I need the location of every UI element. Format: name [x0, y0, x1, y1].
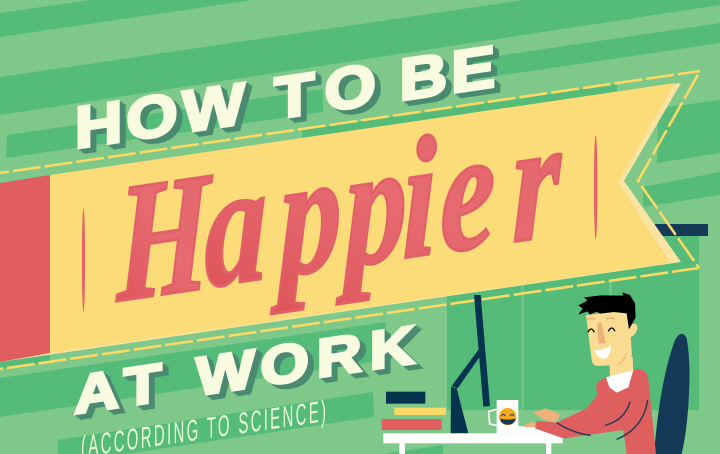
sweater	[535, 369, 656, 454]
eyebrows	[587, 318, 615, 319]
hair	[578, 292, 636, 329]
man's neck and head	[578, 292, 637, 378]
right spindle accent	[594, 135, 598, 239]
heading: how to be: HOWTOBE	[75, 34, 495, 161]
sleeve fold lines	[557, 400, 648, 439]
ribbon red end	[0, 175, 50, 362]
heading: at work: ATWORK	[74, 315, 415, 426]
stitched dashes	[0, 71, 700, 369]
typing hand	[525, 408, 560, 427]
collar	[606, 370, 633, 393]
nose	[597, 323, 606, 343]
left spindle accent	[82, 208, 85, 312]
desk	[383, 433, 563, 454]
heading: how to be: HOWTOBE	[79, 37, 499, 164]
keyboard	[517, 426, 553, 433]
heading: how to be: HOWTOBE	[77, 35, 497, 163]
smile	[594, 345, 611, 359]
heading: at work: ATWORK	[76, 316, 417, 427]
eyes	[588, 328, 615, 332]
book stack	[382, 392, 446, 430]
mug with emoji	[489, 400, 518, 433]
heading: how to be: HOWTOBE	[81, 38, 501, 166]
heading: happier: appier	[205, 81, 562, 325]
heading: at work: ATWORK	[80, 319, 421, 430]
ribbon banner	[0, 83, 681, 362]
cheek line	[617, 351, 627, 365]
heading: happier: H	[115, 136, 213, 338]
heading: at work: ATWORK	[78, 318, 419, 429]
computer monitor side view	[451, 295, 490, 433]
navy wall shelf	[655, 224, 708, 236]
scene: man at desk	[382, 292, 689, 454]
chair	[654, 334, 689, 454]
